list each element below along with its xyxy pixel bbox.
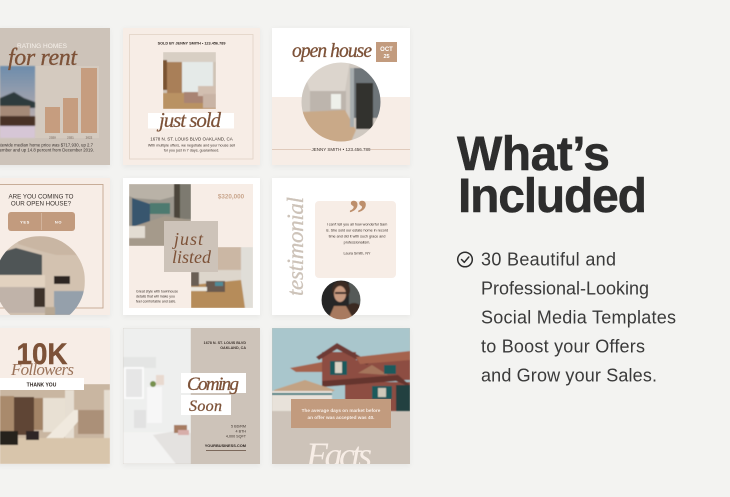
property specs: 5 BD/RM	[231, 424, 246, 428]
script title: open house: open house	[292, 41, 372, 62]
property specs: 4,000 SQFT	[226, 434, 247, 438]
chart backdrop	[35, 66, 99, 138]
website: YOURBUSINESS.COM	[205, 443, 246, 448]
white band	[148, 113, 234, 128]
photo: living room	[163, 52, 216, 109]
panel: coming soon	[123, 328, 260, 464]
big number: 10K	[16, 338, 68, 371]
date badge: 25	[383, 54, 390, 60]
sold by line: SOLD BY JENNY SMITH • 123.456.789	[158, 42, 225, 46]
body text: for you just in 7 days, guaranteed.	[164, 148, 219, 152]
bar chart: 2022	[86, 136, 93, 140]
heading: rating homes: RATING HOMES	[17, 43, 68, 50]
quote box	[315, 201, 396, 278]
feature text: Social Media Templates	[481, 308, 676, 328]
body text	[148, 144, 235, 152]
feature text: to Boost your Offers	[481, 336, 645, 356]
script title: just listed	[172, 229, 212, 267]
icon: check circle	[458, 252, 472, 267]
property specs	[226, 424, 247, 438]
icon: quote marks: ”	[348, 193, 368, 235]
fact text: an offer was accepted was 40.	[308, 415, 374, 420]
feature text: and Grow your Sales.	[481, 366, 657, 386]
price: $320,000	[218, 194, 245, 200]
panel: just listed	[123, 178, 260, 315]
property specs: 4 BTH	[236, 430, 246, 434]
photo: kitchen circle	[0, 236, 85, 315]
panel: testimonial	[272, 178, 410, 321]
feature text: 30 Beautiful and	[481, 250, 616, 270]
heading: What's Included: What’s	[457, 128, 610, 181]
photo: house at dusk	[0, 66, 35, 138]
quote text: I can't tell you all how wonderful Sam	[327, 222, 387, 226]
script title: just listed: listed	[172, 247, 212, 267]
script title: just sold: just sold	[156, 108, 222, 132]
quote text: time and did it with such grace and	[329, 234, 385, 238]
script title: coming: Coming	[187, 374, 239, 395]
heading: What's Included: Included	[458, 170, 647, 223]
script title: for rent: for rent	[8, 45, 78, 71]
bar chart: 2021	[67, 136, 74, 140]
script title: soon: Soon	[189, 398, 222, 415]
address	[204, 341, 246, 350]
address: 1678 N. ST. LOUIS BLVD OAKLAND, CA	[150, 136, 233, 142]
quote text: is. She sold our estate home in record	[326, 228, 388, 232]
bar chart: 2020	[49, 136, 56, 140]
body text: With multiple offers, we negotiate and your house sell	[148, 144, 235, 148]
center box	[164, 221, 218, 272]
card shadows	[0, 29, 410, 466]
fact box	[291, 399, 391, 428]
question: ARE YOU COMING TO	[9, 194, 74, 200]
fact text: The average days on market before	[302, 408, 381, 413]
script title: testimonial: testimonial	[283, 197, 308, 296]
yes no buttons	[8, 212, 75, 231]
photo: empty room circle	[300, 60, 382, 144]
yes no buttons: NO	[55, 220, 62, 224]
script: followers: Followers	[10, 360, 74, 379]
quote text: professionalism.	[344, 240, 370, 244]
description	[136, 290, 178, 304]
panel: open house	[272, 28, 410, 165]
panel: facts	[272, 328, 410, 475]
white band: soon	[181, 395, 231, 415]
thank you band: THANK YOU	[27, 382, 57, 388]
panel: just sold	[123, 28, 260, 165]
photo: white bedroom	[123, 328, 191, 464]
photo: loft interior	[0, 384, 110, 464]
question	[8, 194, 74, 206]
panel: are you coming	[0, 178, 110, 326]
date badge	[376, 42, 397, 62]
panel: 10k followers	[0, 328, 110, 464]
fact text	[302, 408, 381, 420]
rule and contact: JENNY SMITH • 123.456.789	[311, 147, 371, 152]
description: details that will make you	[136, 294, 175, 298]
caption	[0, 142, 94, 152]
quote text: Laura Smith, NY	[343, 252, 371, 256]
panel: rating homes for rent	[0, 28, 110, 165]
white band: coming	[181, 373, 246, 393]
photo: lounge	[191, 247, 253, 308]
quote text	[326, 222, 388, 256]
photo: red house	[272, 328, 410, 411]
yes no buttons: YES	[20, 220, 30, 224]
feature text	[481, 250, 676, 386]
heading: What's Included	[457, 128, 647, 223]
script title: just listed: just	[172, 229, 204, 249]
question: OUR OPEN HOUSE?	[11, 200, 72, 208]
script title: facts: Facts	[305, 435, 372, 475]
photo: lobby	[129, 184, 191, 246]
feature text: Professional-Looking	[481, 278, 649, 298]
description: feel comfortable and safe.	[136, 300, 176, 304]
address: OAKLAND, CA	[220, 346, 246, 350]
bar chart	[45, 68, 97, 140]
description: Great style with townhouse	[136, 290, 178, 294]
photo: portrait circle	[322, 280, 360, 320]
address: 1678 N. ST. LOUIS BLVD	[204, 341, 246, 345]
date badge: OCT	[380, 47, 393, 53]
